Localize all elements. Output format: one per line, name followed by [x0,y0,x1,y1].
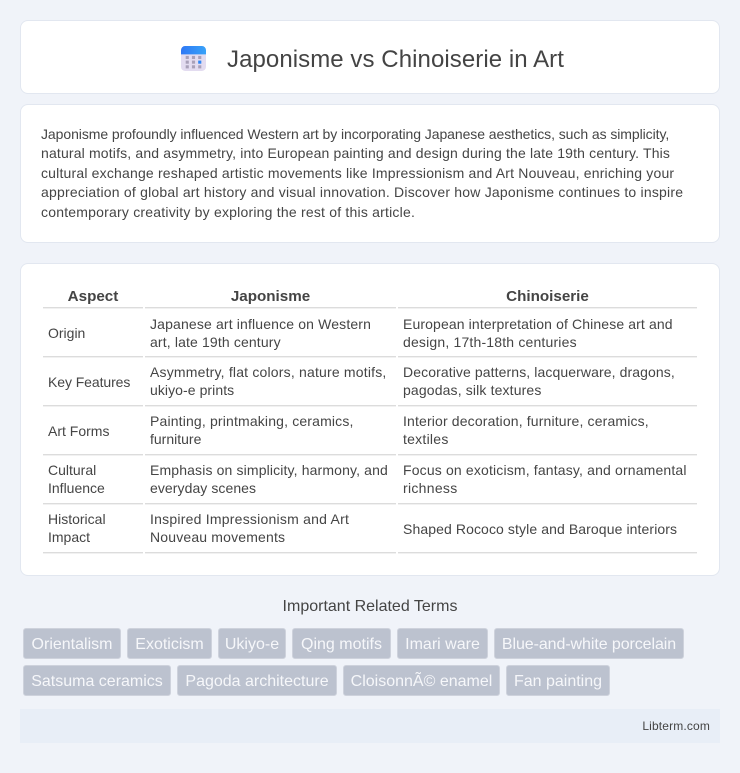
footer [20,709,720,743]
panel: comparison table [20,263,720,576]
table row: cultural influence: Focus on exoticism, fantasy, and ornamental [403,462,687,478]
table header [68,288,589,305]
table row: historical impact: Impact [48,529,90,545]
footer credit: Libterm.com [642,719,710,733]
table row: key features: ukiyo-e prints [150,382,234,398]
table row: key features [48,364,675,398]
table row: art forms: Art Forms [48,423,109,439]
table row: origin [48,316,673,350]
table row: key features: Asymmetry, flat colors, nature motifs, [150,364,386,380]
table row: cultural influence: Cultural [48,462,96,478]
text block: introduction paragraph: cultural exchange reshaped artistic movements like Impressionism and Art Nouveau, enriching your [41,165,674,181]
table row: cultural influence: everyday scenes [150,480,256,496]
table row: origin: Origin [48,325,85,341]
table row: origin: European interpretation of Chinese art and [403,316,673,332]
tag list [23,628,684,696]
tag list: Satsuma ceramics [31,673,163,690]
text block: introduction paragraph: Japonisme profoundly influenced Western art by incorporating Japanese aesthetics, such as simplicity, [41,126,669,142]
table row: cultural influence: richness [403,480,458,496]
table row: historical impact [48,511,677,545]
table row: art forms [48,413,649,447]
panel: introduction [20,104,720,243]
table row: cultural influence: Emphasis on simplicity, harmony, and [150,462,388,478]
table row: cultural influence [48,462,687,496]
title: Japonisme vs Chinoiserie in Art [227,46,564,73]
table row: key features: Decorative patterns, lacquerware, dragons, [403,364,675,380]
table row: key features: pagodas, silk textures [403,382,542,398]
table header: Chinoiserie [506,288,589,305]
tag list: Ukiyo-e [225,636,279,653]
tag list: Blue-and-white porcelain [502,636,676,653]
table row: art forms: textiles [403,431,449,447]
table row: art forms: Interior decoration, furniture, ceramics, [403,413,649,429]
table header: Japonisme [231,288,310,305]
panel: title card [20,20,720,94]
text block: introduction paragraph [41,126,683,220]
tag list: Exoticism [135,636,204,653]
text block: introduction paragraph: natural motifs, and asymmetry, into European painting and design during the late 19th century. This [41,145,670,161]
tag list: Pagoda architecture [185,673,329,690]
table row: historical impact: Shaped Rococo style and Baroque interiors [403,521,677,537]
table header: Aspect [68,288,118,305]
table row: historical impact: Inspired Impressionism and Art [150,511,349,527]
text block: introduction paragraph: appreciation of global art history and visual innovation. Discover how Japonisme continues to inspire [41,184,683,200]
table row: key features: Key Features [48,374,130,390]
table row: art forms: furniture [150,431,201,447]
header rule and row rules [43,307,697,554]
tag list: Imari ware [405,636,480,653]
tag list: Qing motifs [301,636,382,653]
table row: historical impact: Historical [48,511,106,527]
table row: origin: design, 17th-18th centuries [403,334,577,350]
table row: cultural influence: Influence [48,480,105,496]
tag list: CloisonnÃ© enamel [351,673,492,690]
table row: origin: art, late 19th century [150,334,281,350]
heading: important related terms: Important Related Terms [283,598,457,615]
table row: origin: Japanese art influence on Western [150,316,371,332]
table row: historical impact: Nouveau movements [150,529,285,545]
text block: introduction paragraph: contemporary creativity by exploring the rest of this article. [41,204,415,220]
icon: calendar [181,46,206,71]
tag list: Fan painting [514,673,602,690]
table row: art forms: Painting, printmaking, ceramics, [150,413,354,429]
tag list: Orientalism [32,636,112,653]
